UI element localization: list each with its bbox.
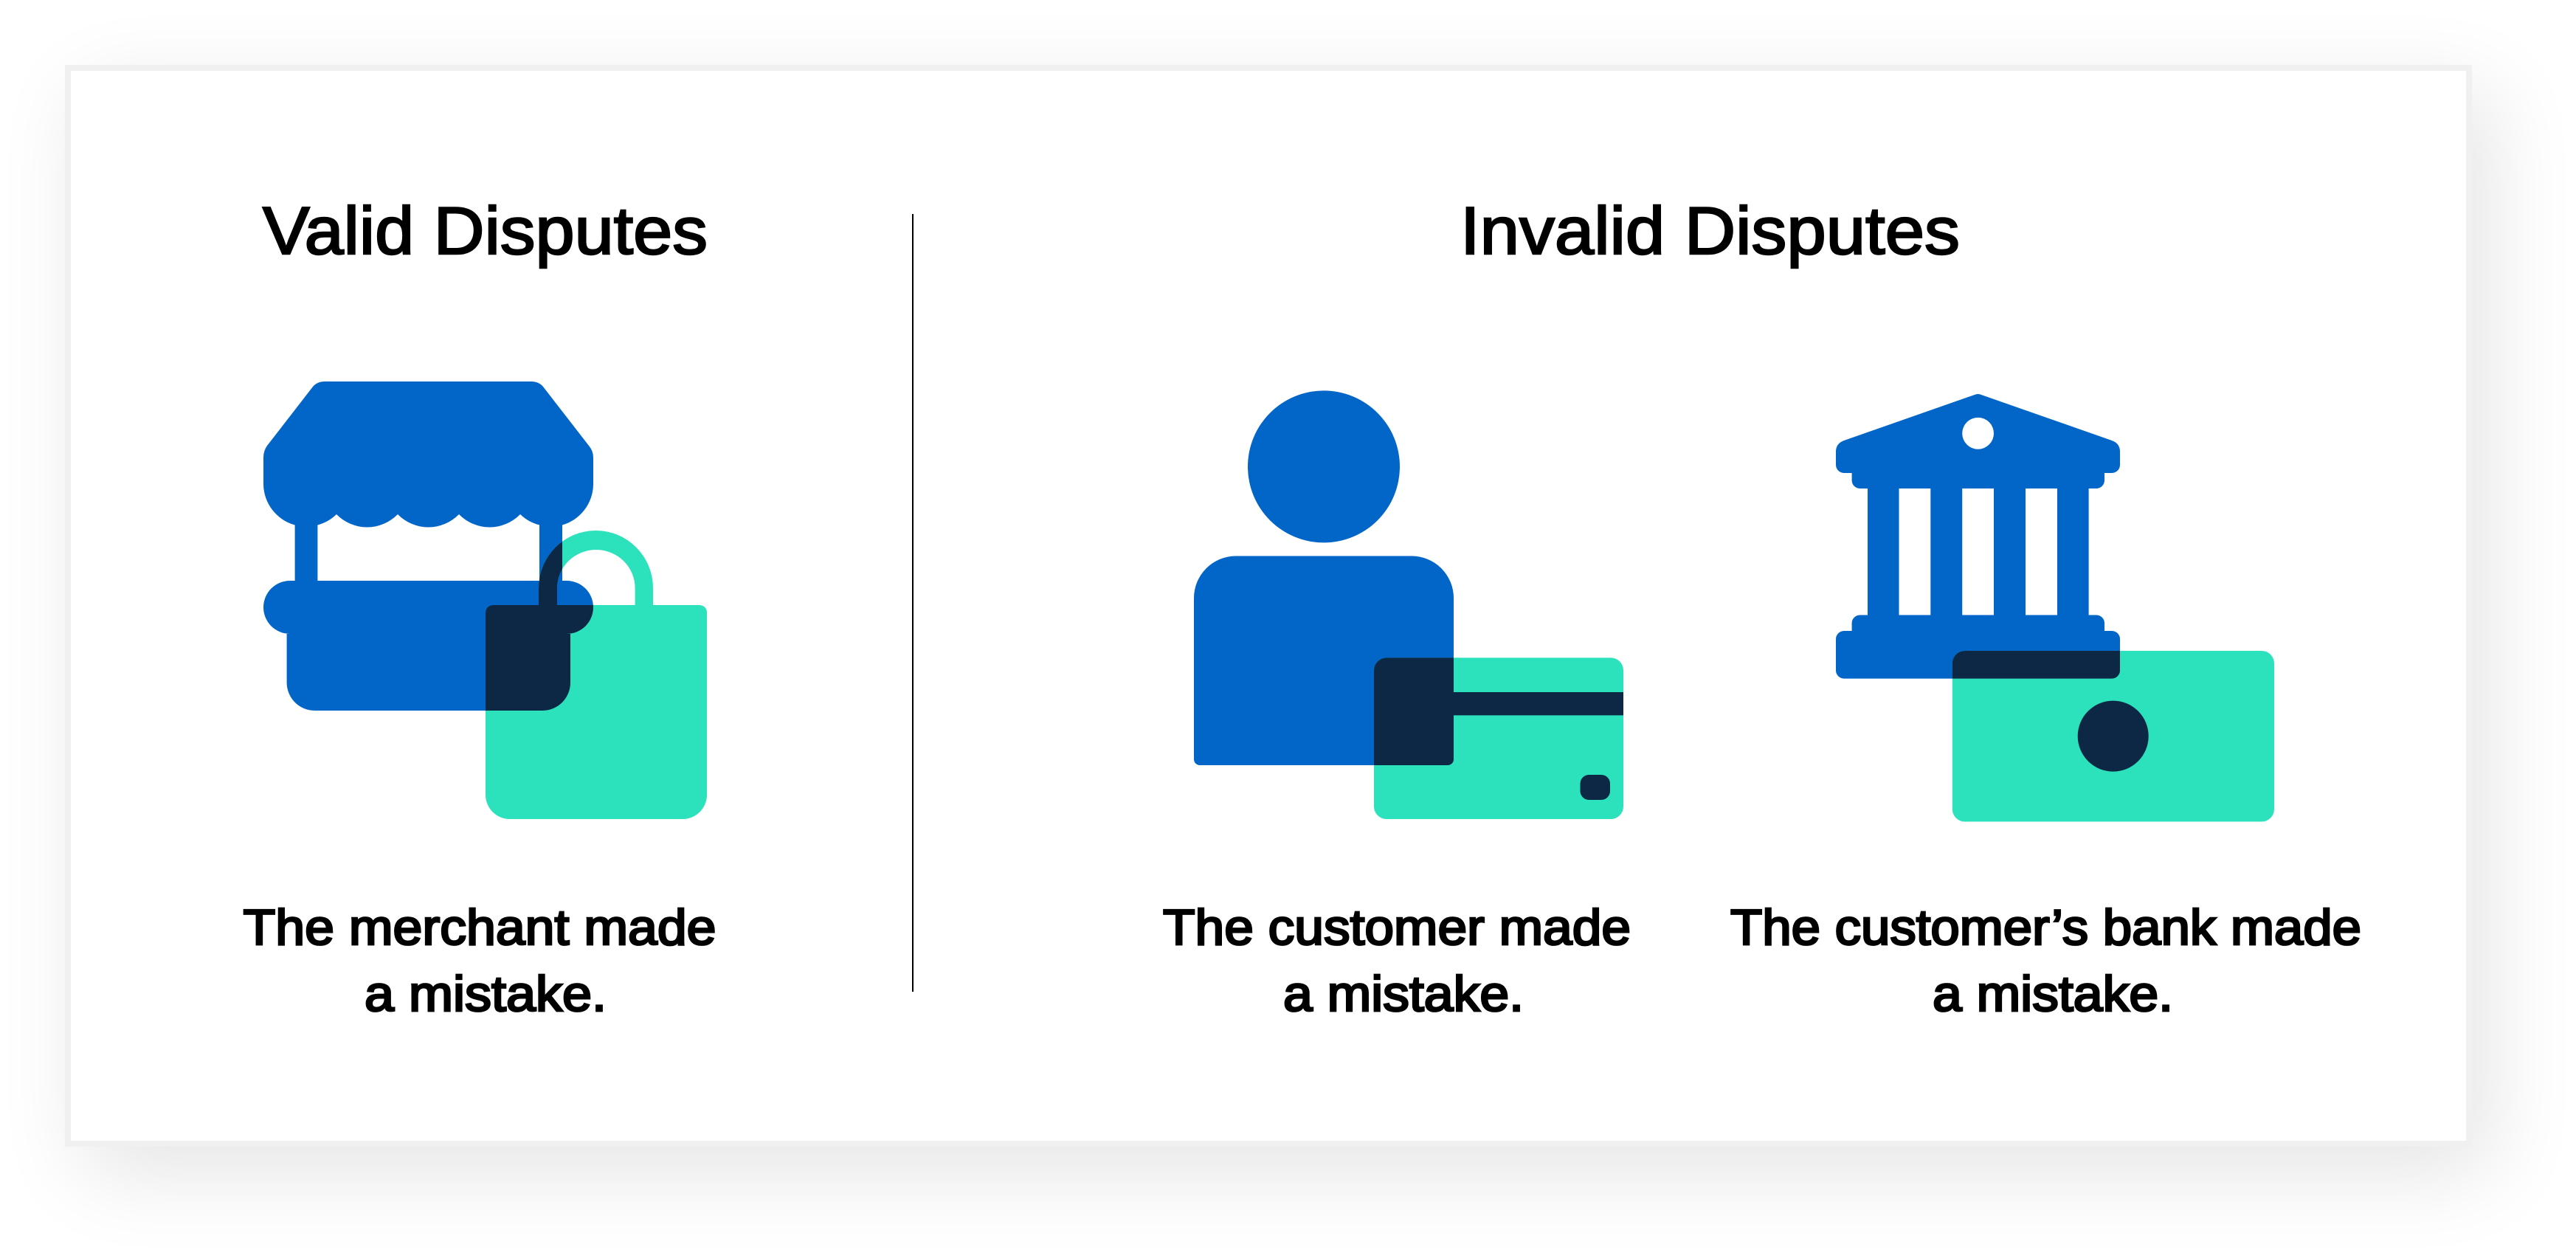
panel: valid disputes xyxy=(244,194,716,1022)
text: bank caption xyxy=(1730,899,2361,1022)
text: merchant caption xyxy=(244,899,716,1022)
heading: valid disputes: Valid Disputes xyxy=(263,194,708,269)
text: merchant caption: a mistake. xyxy=(365,966,607,1022)
text: customer caption: a mistake. xyxy=(1283,966,1524,1022)
icon: card chip xyxy=(1581,775,1610,800)
icon: customer with credit card xyxy=(1194,390,1623,819)
infographic content xyxy=(244,204,2360,1012)
heading: invalid disputes: Invalid Disputes xyxy=(1460,194,1960,269)
text: merchant caption: The merchant made xyxy=(244,899,716,956)
icon: market stall with shopping bag xyxy=(263,381,707,819)
icon: person head xyxy=(1248,390,1400,542)
icon: bank with banknote xyxy=(1836,394,2274,822)
icon: banknote xyxy=(1952,651,2274,822)
icon: banknote circle xyxy=(2078,701,2149,772)
icon: stall and bag overlap xyxy=(486,542,593,711)
text: customer caption: The customer made xyxy=(1163,899,1631,956)
icon: market stall xyxy=(263,381,593,711)
text: bank caption: The customer’s bank made xyxy=(1730,899,2361,956)
icon: shopping bag xyxy=(486,531,707,819)
panel: invalid disputes xyxy=(1163,194,2361,1022)
divider xyxy=(912,214,914,992)
icon: bank building xyxy=(1836,394,2120,679)
icon: card stripe xyxy=(1454,692,1623,715)
icon: bank and banknote overlap xyxy=(1948,651,2120,679)
text: customer caption xyxy=(1163,899,1631,1022)
icon: person and card overlap xyxy=(1374,657,1454,765)
icon: person body xyxy=(1194,556,1454,765)
icon: credit card xyxy=(1374,657,1623,819)
text: bank caption: a mistake. xyxy=(1933,966,2173,1022)
